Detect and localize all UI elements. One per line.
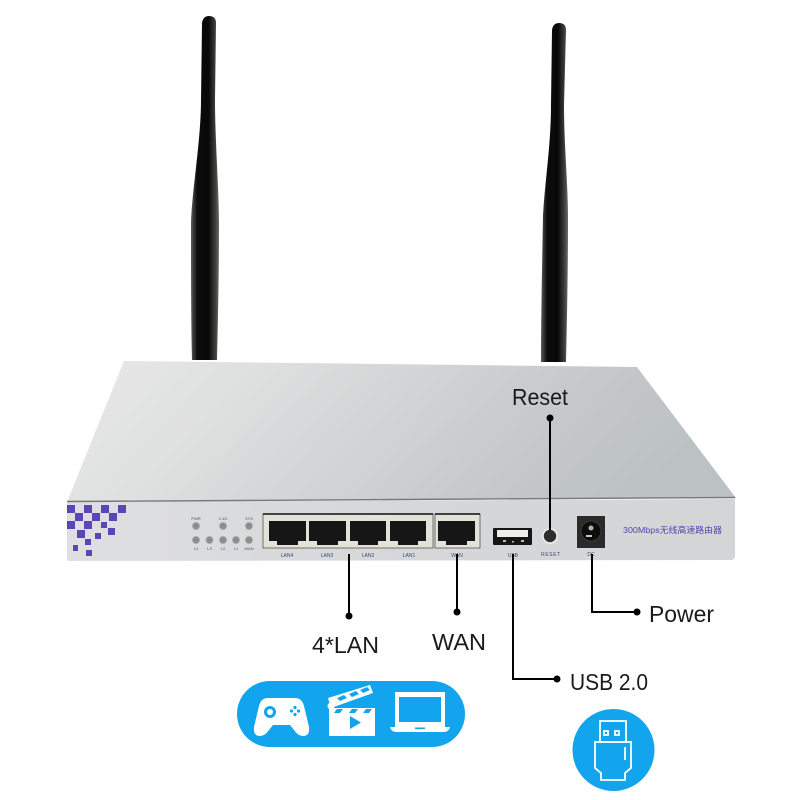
callout: Reset: Reset [512,384,569,410]
callout: USB 2.0: USB 2.0 [570,669,648,695]
port labels: USB [508,553,519,559]
port labels: LAN4 [281,553,293,559]
callout: Reset [512,384,569,530]
product name on panel: 300Mbps无线高速路由器 [623,525,723,535]
LED labels: L4 [194,546,199,551]
LED labels: SYS [245,516,253,521]
router top surface [67,361,736,502]
LED labels: L2 [221,546,226,551]
port labels: LAN3 [321,553,333,559]
callout: WAN: WAN [432,629,486,655]
callout: WAN [432,554,486,655]
router body [67,361,736,561]
port labels: RESET [541,552,561,558]
port labels: LAN2 [362,553,374,559]
router front panel [67,499,735,561]
icon: laptop [390,692,450,732]
LED labels: L3 [207,546,212,551]
icon: game controller [254,698,309,736]
port labels: WAN [451,553,463,559]
WAN port [435,514,480,548]
left antenna [191,16,219,360]
port labels: LAN1 [403,553,415,559]
right antenna [541,23,568,362]
callout: USB 2.0 [513,554,648,695]
blue pill with use-case icons [237,681,465,747]
LED labels: WAN [244,546,254,551]
status LEDs [192,522,252,544]
LED labels: L1 [234,546,239,551]
DC power jack [577,516,605,548]
purple checker logo [67,505,126,556]
callout: 4*LAN: 4*LAN [312,632,379,658]
LED labels: 2.4G [219,516,227,521]
icon: film clapperboard [328,685,375,736]
LAN port block [263,514,433,548]
callout: Power: Power [649,601,714,627]
reset button [543,529,557,543]
port labels: DC [587,552,595,558]
USB icon badge [572,709,654,791]
LED labels: PWR [191,516,201,521]
LED labels [191,516,254,551]
callout: Power [592,554,714,627]
port labels [281,552,595,559]
callout: 4*LAN [312,554,379,658]
USB port [493,528,532,545]
front edge line [67,498,735,502]
